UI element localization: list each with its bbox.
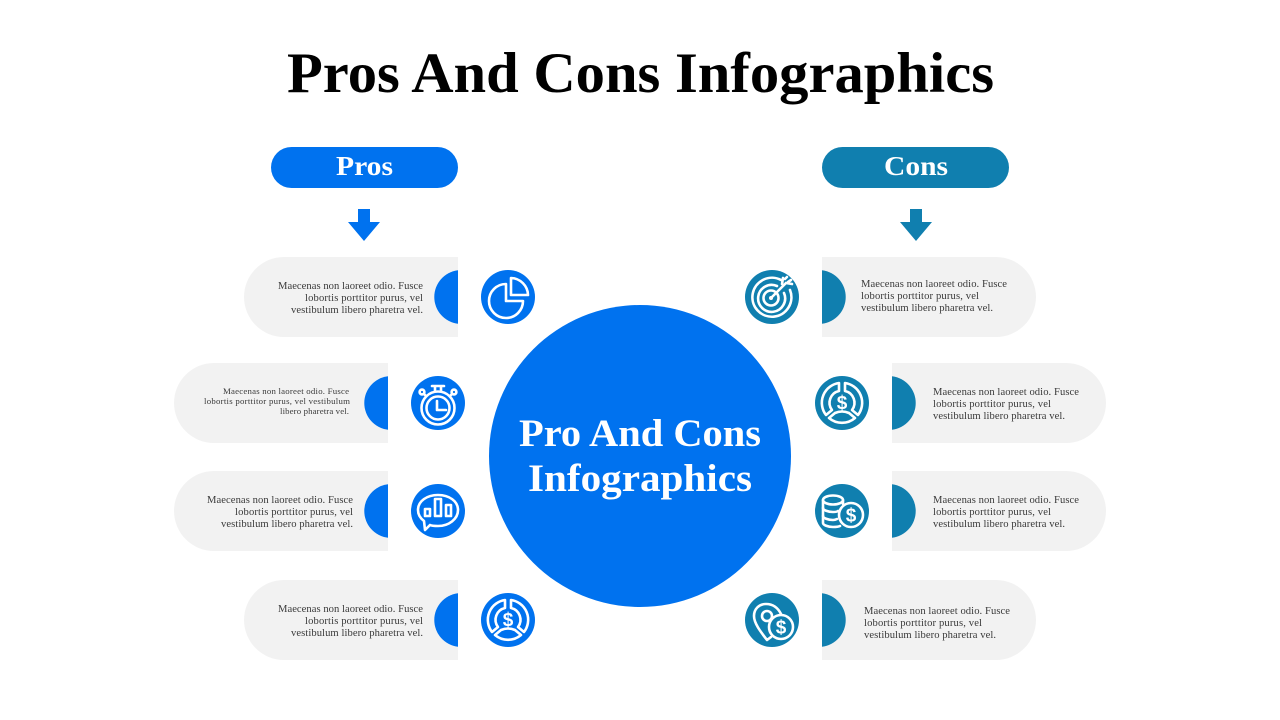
panel: cons item 2 xyxy=(892,363,1106,443)
panel: cons item 2: vestibulum libero pharetra vel. xyxy=(933,411,1065,422)
cons heading pill xyxy=(822,147,1009,188)
panel: pros item 4: vestibulum libero pharetra vel. xyxy=(291,628,423,639)
panel: cons item 2: lobortis porttitor purus, vel xyxy=(933,399,1051,410)
panel: pros item 3: vestibulum libero pharetra vel. xyxy=(221,519,353,530)
panel: pros item 3 xyxy=(174,471,388,551)
panel: pros item 1: Maecenas non laoreet odio. Fusce xyxy=(278,281,423,292)
icon: dollar ring xyxy=(815,376,869,430)
icon: stopwatch xyxy=(411,376,465,430)
icon: chat bubble with bars xyxy=(411,484,465,538)
panel: cons item 1: lobortis porttitor purus, vel xyxy=(861,291,979,302)
icon: dollar ring: $ xyxy=(503,610,514,631)
center circle: Infographics xyxy=(528,457,752,500)
panel: pros item 2: lobortis porttitor purus, vel vestibulum xyxy=(204,396,350,406)
panel: cons item 1: vestibulum libero pharetra vel. xyxy=(861,303,993,314)
panel: pros item 4: Maecenas non laoreet odio. Fusce xyxy=(278,604,423,615)
icon: coin stack: $ xyxy=(846,506,857,526)
panel: cons item 4 xyxy=(822,580,1036,660)
panel: pros item 2: libero pharetra vel. xyxy=(280,406,349,416)
panel: cons item 1: Maecenas non laoreet odio. Fusce xyxy=(861,279,1007,290)
panel: pros item 1 xyxy=(244,257,458,337)
cons heading pill: Cons xyxy=(884,151,948,181)
icon: pie chart xyxy=(481,270,535,324)
panel: cons item 2: Maecenas non laoreet odio. Fusce xyxy=(933,387,1079,398)
pros column xyxy=(174,147,535,660)
panel: pros item 3: Maecenas non laoreet odio. Fusce xyxy=(207,495,353,506)
center circle xyxy=(489,305,791,607)
panel: cons item 1 xyxy=(822,257,1036,337)
panel: pros item 4: lobortis porttitor purus, vel xyxy=(305,616,423,627)
icon: dollar ring xyxy=(481,593,535,647)
panel: pros item 3: lobortis porttitor purus, vel xyxy=(235,507,353,518)
panel: cons item 4: vestibulum libero pharetra vel. xyxy=(864,630,996,641)
arrow: cons down xyxy=(900,209,932,241)
panel: pros item 2: Maecenas non laoreet odio. Fusce xyxy=(223,386,349,396)
icon: target xyxy=(745,270,799,324)
panel: pros item 1: lobortis porttitor purus, vel xyxy=(305,293,423,304)
panel: pros item 2 xyxy=(174,363,388,443)
icon: map pin with coin xyxy=(745,593,799,647)
icon: dollar ring: $ xyxy=(837,393,848,414)
panel: cons item 3 xyxy=(892,471,1106,551)
pros heading pill xyxy=(271,147,458,188)
icon: coin stack xyxy=(815,484,869,538)
arrow: pros down xyxy=(348,209,380,241)
panel: cons item 3: vestibulum libero pharetra vel. xyxy=(933,519,1065,530)
panel: cons item 4: lobortis porttitor purus, vel xyxy=(864,618,982,629)
panel: pros item 1: vestibulum libero pharetra vel. xyxy=(291,305,423,316)
pros heading pill: Pros xyxy=(336,151,393,181)
title: Pros And Cons Infographics xyxy=(287,42,994,105)
panel: cons item 3: lobortis porttitor purus, vel xyxy=(933,507,1051,518)
cons column xyxy=(745,147,1106,660)
panel: cons item 3: Maecenas non laoreet odio. Fusce xyxy=(933,495,1079,506)
panel: cons item 4: Maecenas non laoreet odio. Fusce xyxy=(864,606,1010,617)
panel: pros item 4 xyxy=(244,580,458,660)
center circle: Pro And Cons xyxy=(519,412,761,455)
icon: map pin with coin: $ xyxy=(776,618,787,638)
